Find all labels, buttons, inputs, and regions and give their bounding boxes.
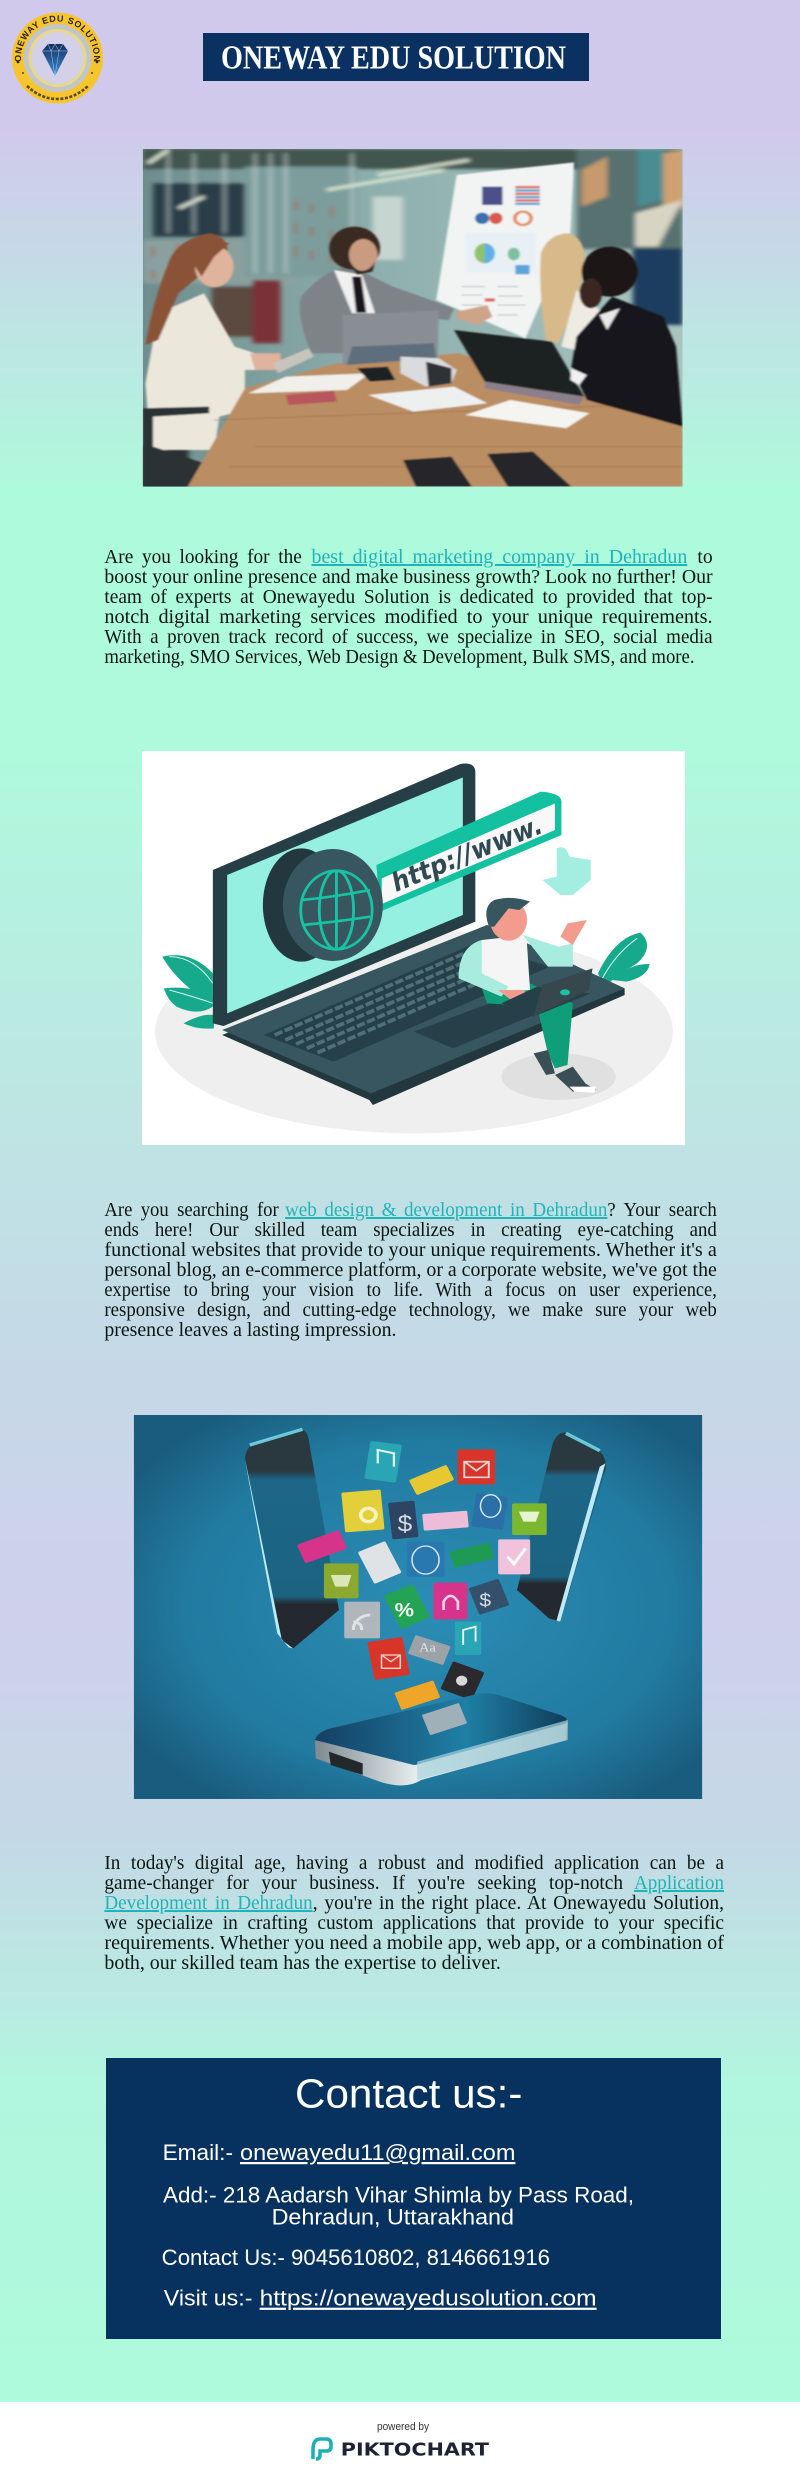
paragraph: web design and development: responsive design, and cutting-edge technology, we make sure your web <box>104 1299 717 1321</box>
paragraph: digital marketing: marketing, SMO Services, Web Design & Development, Bulk SMS, and more. <box>104 646 694 668</box>
footer: powered by Piktochart: PIKTOCHART <box>341 2440 490 2461</box>
paragraph: digital marketing <box>104 546 713 668</box>
black laptop <box>454 330 584 397</box>
paragraph: application development: Application <box>634 1872 724 1894</box>
centre man <box>300 267 454 353</box>
paragraph: web design and development <box>104 1199 717 1341</box>
footer: powered by Piktochart <box>0 2402 800 2482</box>
title banner <box>203 33 589 81</box>
paragraph: web design and development: functional websites that provide to your unique requirements. Whether it's a <box>104 1239 717 1261</box>
paragraph: application development: , you're in the right place. At Onewayedu Solution, <box>313 1892 724 1914</box>
paragraph: web design and development: personal blog, an e-commerce platform, or a corporate website, we've got the <box>104 1259 717 1281</box>
icon: Piktochart mark <box>313 2439 331 2459</box>
illustration: phones with floating app icons: Aa <box>419 1640 436 1654</box>
paragraph: digital marketing: notch digital marketing services modified to your unique requirements. <box>104 606 713 628</box>
bottom phone <box>315 1722 568 1785</box>
address lines: Add:- 218 Aadarsh Vihar Shimla by Pass Road, <box>163 2183 634 2208</box>
website line: Visit us:- <box>164 2286 252 2311</box>
logo: Oneway Edu Solution badge: ONEWAY EDU SOLUTION <box>14 15 100 62</box>
paragraph: application development: In today's digital age, having a robust and modified application can be a <box>104 1852 724 1874</box>
left woman <box>145 293 276 450</box>
illustration: phones with floating app icons <box>134 1415 702 1799</box>
paragraph: web design and development: expertise to bring your vision to life. With a focus on user experience, <box>104 1279 717 1301</box>
paragraph: web design and development: web design & development in Dehradun <box>285 1199 607 1221</box>
VR headset <box>401 357 457 387</box>
paragraph: application development: game-changer for your business. If you're seeking top-notch <box>104 1872 623 1894</box>
illustration: phones with floating app icons: % <box>395 1600 414 1621</box>
table <box>188 353 683 487</box>
paragraph: application development: Development in Dehradun <box>104 1892 313 1914</box>
leaves <box>162 933 650 1029</box>
contact heading: Contact us:- <box>295 2071 522 2117</box>
footer: powered by Piktochart: powered by <box>377 2421 429 2433</box>
app icons <box>297 1441 547 1710</box>
email line: Email:- <box>163 2140 233 2165</box>
email line: onewayedu11@gmail.com <box>240 2140 515 2165</box>
photo: business team meeting around a table <box>143 149 683 487</box>
right phone <box>517 1433 606 1622</box>
paragraph: application development: we specialize in crafting custom applications that provide to your specific <box>104 1912 724 1934</box>
title banner: ONEWAY EDU SOLUTION <box>221 39 566 76</box>
paragraph: web design and development: ? Your search <box>607 1199 717 1221</box>
paragraph: digital marketing: With a proven track record of success, we specialize in SEO, social media <box>104 626 713 648</box>
paragraph: application development: both, our skilled team has the expertise to deliver. <box>104 1952 501 1974</box>
website line: https://onewayedusolution.com <box>260 2286 597 2311</box>
paragraph: web design and development: presence leaves a lasting impression. <box>104 1319 397 1341</box>
silver laptop <box>343 311 439 365</box>
paragraph: web design and development: ends here! Our skilled team specializes in creating eye-catching and <box>104 1219 717 1241</box>
paragraph: application development <box>104 1852 724 1974</box>
keyboard <box>264 943 550 1062</box>
address bar <box>376 792 561 912</box>
address bar text: http://www. <box>387 811 547 898</box>
laptop screen <box>213 764 475 1026</box>
globe button <box>263 848 340 962</box>
paragraph: digital marketing: team of experts at Onewayedu Solution is dedicated to provided that top- <box>104 586 713 608</box>
address lines: Dehradun, Uttarakhand <box>272 2204 514 2229</box>
right man <box>571 297 683 427</box>
icon glyphs: $ <box>398 1511 413 1537</box>
man <box>482 983 573 1068</box>
paragraph: digital marketing: boost your online presence and make business growth? Look no further! Our <box>104 566 713 588</box>
paragraph: web design and development: Are you searching for <box>104 1199 279 1221</box>
laptop base <box>222 925 625 1105</box>
paragraph: digital marketing: Are you looking for the <box>104 546 302 568</box>
phone line: Contact Us:- 9045610802, 8146661916 <box>162 2245 550 2270</box>
panel: contact details <box>106 2058 721 2339</box>
illustration: phones with floating app icons: $ <box>479 1591 491 1611</box>
whiteboard <box>436 162 574 338</box>
left phone <box>245 1429 339 1648</box>
paragraph: digital marketing: to <box>697 546 713 568</box>
address lines <box>163 2183 634 2229</box>
logo: Oneway Edu Solution badge <box>12 12 103 104</box>
papers and devices <box>248 373 370 393</box>
paragraph: digital marketing: best digital marketing company in Dehradun <box>312 546 687 568</box>
website line <box>164 2286 597 2311</box>
illustration: laptop with http://www. address bar and sitting man <box>142 751 685 1145</box>
paragraph: application development: requirements. Whether you need a mobile app, web app, or a combination of <box>104 1932 724 1954</box>
floor <box>155 930 673 1133</box>
blonde woman <box>540 233 584 343</box>
pointer hand <box>542 847 591 895</box>
